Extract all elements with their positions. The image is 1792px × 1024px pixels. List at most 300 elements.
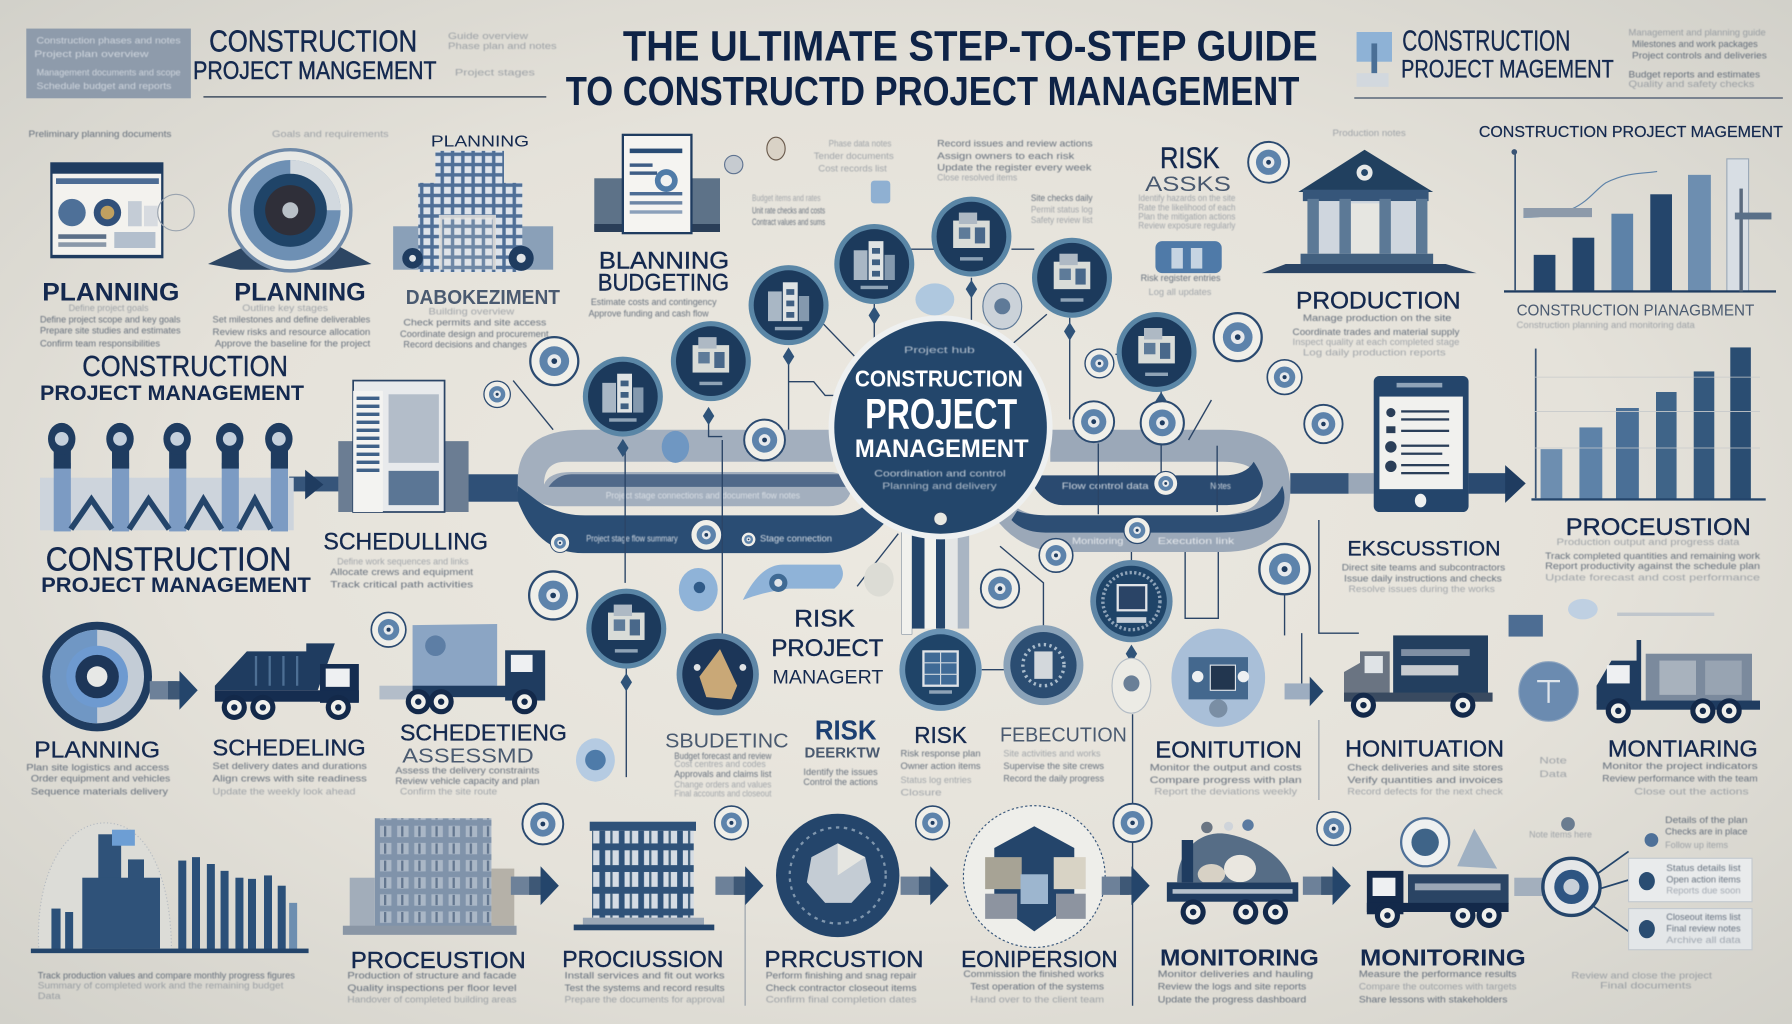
text block: notes: Assign owners to each risk xyxy=(937,151,1075,161)
hub text: Planning and delivery xyxy=(882,481,997,491)
diamonds xyxy=(617,280,1167,691)
label: risk project management xyxy=(771,605,884,688)
text block xyxy=(1150,762,1302,796)
ribbon: right loop xyxy=(994,430,1290,552)
text block: Update forecast and cost performance xyxy=(1545,573,1760,583)
text block: Handover of completed building areas xyxy=(347,994,517,1004)
text block xyxy=(803,767,878,787)
text block: Log daily production reports xyxy=(1303,347,1446,357)
panel: header left gray note: Schedule budget and reports xyxy=(37,81,172,91)
text block: notes: Safety review list xyxy=(1031,215,1093,225)
hub text: Coordination and control xyxy=(874,469,1006,479)
text block: Close out the actions xyxy=(1634,786,1749,796)
ribbon: right loop: Execution link xyxy=(1158,536,1235,546)
label: scheduling: SCHEDULLING xyxy=(323,529,488,556)
text block: Data xyxy=(38,991,62,1001)
icon: truck with seal xyxy=(1367,818,1509,928)
text block: top notes xyxy=(814,138,894,173)
text block xyxy=(1342,562,1506,594)
text block: side note: Note xyxy=(1539,755,1567,765)
arrow xyxy=(1303,866,1351,905)
text block: Approve funding and cash flow xyxy=(589,309,709,319)
label: scheduling assessment: SCHEDETIENG xyxy=(400,720,567,746)
icon: marker xyxy=(1317,812,1351,845)
text block xyxy=(1359,969,1517,1004)
arrow xyxy=(1285,677,1323,706)
text block: Estimate costs and contingency xyxy=(591,297,717,307)
text block: budget notes: Contract values and sums xyxy=(752,217,825,227)
text block: Define project goals xyxy=(69,303,149,313)
panel: header left gray note xyxy=(26,29,191,98)
text block: side note xyxy=(1539,755,1568,779)
text block: Record the daily progress xyxy=(1003,774,1104,784)
text block: notes xyxy=(937,138,1093,225)
text block: Set milestones and define deliverables xyxy=(213,314,371,324)
text block: Status log entries xyxy=(901,775,972,785)
diagram: hub with two cards xyxy=(1543,851,1752,950)
text block: Review risks and resource allocation xyxy=(213,327,370,337)
text block xyxy=(1003,749,1104,784)
label: monitoring: MONITORING xyxy=(1360,945,1526,971)
ribbon: left loop xyxy=(518,430,891,553)
text block: Review performance with the team xyxy=(1602,774,1758,784)
icon: hub pin xyxy=(934,512,947,526)
label: scheduling assessment xyxy=(400,720,567,767)
text block xyxy=(26,762,171,796)
text block: Allocate crews and equipment xyxy=(330,567,474,577)
text block: budget notes: Unit rate checks and costs xyxy=(752,206,825,216)
diagram: hub with two cards: Status details list xyxy=(1666,863,1741,873)
text block: Define project scope and key goals xyxy=(40,314,181,324)
text block: Summary of completed work and the remaining budget xyxy=(38,981,284,991)
icon: top markers xyxy=(1509,599,1714,637)
icon: marker xyxy=(715,806,748,840)
central hub xyxy=(829,315,1053,539)
caption note: Construction planning and monitoring data xyxy=(1517,320,1696,330)
text block xyxy=(901,749,981,797)
label: eonipersion: EONIPERSION xyxy=(961,946,1118,972)
heading: construction project mangement right: CONSTRUCTION xyxy=(1402,25,1570,57)
icon: box truck xyxy=(379,624,545,714)
title: TO CONSTRUCTD PROJECT MANAGEMENT xyxy=(566,68,1299,114)
label: monitoring 3: MONTIARING xyxy=(1608,736,1758,762)
text block: Control the actions xyxy=(803,777,878,787)
label: monitoring 1: EONITUTION xyxy=(1155,737,1302,763)
icon: seal with temple xyxy=(963,806,1105,947)
node lower 5 xyxy=(1090,560,1173,642)
hub text: PROJECT xyxy=(865,391,1017,438)
text block: row notes: Preliminary planning documents xyxy=(29,129,172,139)
row 4 flow xyxy=(31,804,1752,1004)
heading xyxy=(41,541,312,597)
text block: Risk response plan xyxy=(901,749,981,759)
text block: Test operation of the systems xyxy=(970,982,1104,992)
heading xyxy=(40,351,305,405)
text block: header small left: Phase plan and notes xyxy=(448,41,557,51)
icon: target dial xyxy=(208,150,371,271)
text block: Record defects for the next check xyxy=(1347,786,1503,796)
text block: Production of structure and facade xyxy=(347,970,517,980)
chart caption: CONSTRUCTION PIANAGBMENT xyxy=(1517,302,1754,319)
label: blanning budgeting: BUDGETING xyxy=(598,269,729,296)
text block: Check contractor closeout items xyxy=(766,983,917,993)
text block: Approve the baseline for the project xyxy=(215,338,371,348)
text block: top right notes: Details of the plan xyxy=(1665,815,1747,825)
text block: top right notes xyxy=(1529,815,1747,850)
text block: header small right: Management and planning guide xyxy=(1629,27,1766,37)
text block: top notes: Phase data notes xyxy=(829,138,892,148)
text block xyxy=(347,970,517,1004)
label: monitoring 2: HONITUATION xyxy=(1345,736,1504,762)
text block: Owner action items xyxy=(901,761,981,771)
text block: Risk register entries xyxy=(1141,273,1221,283)
label: prrcustion: PRRCUSTION xyxy=(765,946,923,972)
label: risk sub: DEERKTW xyxy=(805,746,880,762)
text block: Hand over to the client team xyxy=(970,994,1104,1004)
text block: header small right: Project controls and deliveries xyxy=(1632,50,1767,60)
panel: header left gray note: Management documents and scope xyxy=(37,67,181,77)
node lower 3 xyxy=(899,629,982,711)
heading: construction project mangement left: CONSTRUCTION xyxy=(209,23,417,58)
pale markers xyxy=(662,283,1151,713)
text block: Define work sequences and links xyxy=(337,557,469,567)
text block: Compare progress with plan xyxy=(1150,775,1302,785)
ribbon: right loop: Flow control data xyxy=(1062,481,1150,491)
text block: Outline key stages xyxy=(242,303,328,313)
arrow xyxy=(1102,866,1150,905)
text block: Test the systems and record results xyxy=(565,983,725,993)
node 7 xyxy=(1117,312,1197,392)
text block: Order equipment and vehicles xyxy=(31,774,171,784)
text block: Monitor deliveries and hauling xyxy=(1158,969,1313,979)
text block: Issue daily instructions and checks xyxy=(1344,574,1502,584)
text block xyxy=(40,303,181,348)
icon: marker xyxy=(916,806,949,840)
icon: presentation screen xyxy=(50,162,194,258)
text block: notes: Permit status log xyxy=(1031,205,1093,215)
text block: Install services and fit out works xyxy=(565,970,725,980)
panel: header left gray note: Project plan overview xyxy=(34,49,149,59)
crane xyxy=(1735,189,1771,291)
panel: construction project management pins xyxy=(40,351,488,597)
text block: Check permits and site access xyxy=(403,318,547,328)
hub text xyxy=(855,345,1029,491)
node lower 4 xyxy=(1003,625,1083,705)
icon: building xyxy=(393,151,553,272)
heading: construction project mangement left xyxy=(193,23,546,98)
title xyxy=(566,23,1318,114)
text block: Sequence materials delivery xyxy=(31,786,169,796)
text block: Assess the delivery constraints xyxy=(395,766,540,776)
axes xyxy=(1531,349,1766,501)
diagram: hub with two cards: Reports due soon xyxy=(1666,886,1741,896)
label: risk project management: RISK xyxy=(794,605,855,632)
arrow xyxy=(511,866,559,905)
label: blanning budgeting: BLANNING xyxy=(599,248,729,275)
text block: final note xyxy=(1571,970,1713,991)
ribbon: right loop: Monitoring xyxy=(1072,536,1123,546)
text block: header small right: Quality and safety checks xyxy=(1629,79,1755,89)
mini icons xyxy=(484,142,1343,619)
text block: Set delivery dates and durations xyxy=(213,761,367,771)
icon: badge circle xyxy=(776,814,899,937)
panel: blanning budgeting xyxy=(29,129,894,319)
heading: construction project mangement right xyxy=(1354,25,1783,99)
panel: risk assessment xyxy=(937,138,1236,297)
icon: monitoring badge xyxy=(1519,662,1578,721)
panel: planning dial xyxy=(208,150,371,348)
text block: Align crews with site readiness xyxy=(213,774,367,784)
text block: notes: Record issues and review actions xyxy=(937,138,1093,148)
text block xyxy=(330,557,474,589)
icon: temple building xyxy=(1262,150,1477,273)
text block: Track completed quantities and remaining work xyxy=(1545,551,1760,561)
text block xyxy=(1293,313,1460,357)
text block: header small left xyxy=(448,31,557,77)
text block: Quality inspections per floor level xyxy=(347,983,517,993)
connector lines xyxy=(513,249,1359,1006)
text block: Prepare the documents for approval xyxy=(565,994,725,1004)
row 3 flow xyxy=(26,560,1760,799)
text block: row notes: Goals and requirements xyxy=(272,129,389,139)
panel: building planning xyxy=(393,133,560,349)
text block: Monitor the project indicators xyxy=(1602,761,1758,771)
text block: Coordinate trades and material supply xyxy=(1293,327,1460,337)
text block: Identify hazards on the site xyxy=(1138,193,1235,203)
text block: Plan site logistics and access xyxy=(26,762,170,772)
text block: Update the weekly look ahead xyxy=(213,786,355,796)
label: planning: PLANNING xyxy=(34,737,160,763)
text block: Production output and progress data xyxy=(1557,537,1741,547)
text block: Coordinate design and procurement xyxy=(400,329,549,339)
text block: Share lessons with stakeholders xyxy=(1359,994,1508,1004)
text block xyxy=(1141,273,1221,297)
chart: building with bars xyxy=(31,823,309,953)
text block: Report the deviations weekly xyxy=(1154,786,1298,796)
label: risk: RISK xyxy=(815,714,877,745)
hub text: MANAGEMENT xyxy=(855,435,1029,463)
node lower 1 xyxy=(586,589,666,669)
axes xyxy=(1504,149,1776,293)
text block: Monitor the output and costs xyxy=(1150,762,1302,772)
text block: Record decisions and changes xyxy=(403,339,527,349)
text block: header small right: Budget reports and estimates xyxy=(1629,70,1760,80)
text block: header small right: Milestones and work packages xyxy=(1632,39,1758,49)
label: execution: EKSCUSSTION xyxy=(1347,535,1501,560)
text block: Manage production on the site xyxy=(1303,313,1451,323)
node 2 xyxy=(671,321,751,401)
text block: Building overview xyxy=(429,306,515,316)
ribbon: left loop: Stage connection xyxy=(760,534,832,544)
text block: Rate the likelihood of each xyxy=(1138,202,1235,212)
text block: Confirm team responsibilities xyxy=(40,338,160,348)
icon: dump truck xyxy=(215,643,359,720)
chart title: CONSTRUCTION PROJECT MAGEMENT xyxy=(1479,124,1783,141)
diagram: ribbons and connectors xyxy=(289,249,1526,1006)
diagram: hub with two cards: Open action items xyxy=(1666,874,1741,884)
text block: Plan the mitigation actions xyxy=(1138,211,1236,221)
diagram: hub with two cards: Final review notes xyxy=(1666,923,1741,933)
node 3 xyxy=(749,265,829,345)
text block xyxy=(38,970,295,1001)
text block: Budget forecast and review xyxy=(674,751,772,761)
text block xyxy=(1158,969,1313,1004)
text block: Commission the finished works xyxy=(963,969,1104,979)
text block: Approvals and claims list xyxy=(674,769,772,779)
text block: top right notes: Checks are in place xyxy=(1665,826,1747,836)
text block xyxy=(674,751,772,799)
text block: side note: Data xyxy=(1539,769,1568,779)
heading: construction project mangement left: PROJECT MANGEMENT xyxy=(193,57,437,85)
label: scheduling: SCHEDELING xyxy=(213,734,366,760)
label: production: PRODUCTION xyxy=(1296,288,1461,315)
text block: Cost centres and codes xyxy=(674,759,766,769)
label: planning small: PLANNING xyxy=(431,133,529,150)
text block: Perform finishing and snag repair xyxy=(766,970,917,980)
label: procession: PROCIUSSION xyxy=(562,946,723,972)
text block xyxy=(1347,762,1503,796)
icon: tablet xyxy=(1374,376,1469,512)
text block: notes: Update the register every week xyxy=(937,162,1092,172)
arrow xyxy=(150,671,198,710)
text block: Confirm final completion dates xyxy=(766,994,917,1004)
text block: top notes: Tender documents xyxy=(814,151,894,161)
node 6 xyxy=(1032,238,1112,318)
node 1 xyxy=(583,357,663,437)
panel: header left gray note: Construction phases and notes xyxy=(37,35,181,45)
label: planning: PLANNING xyxy=(42,279,179,307)
icon: risk panel xyxy=(1155,241,1222,273)
text block: Change orders and values xyxy=(674,779,772,789)
text block: Identify the issues xyxy=(803,767,878,777)
text block: Check deliveries and site stores xyxy=(1347,762,1503,772)
trend annotation xyxy=(1523,171,1657,217)
text block: Compare the outcomes with targets xyxy=(1359,982,1517,992)
diagram: hub with two cards: Closeout items list xyxy=(1666,912,1741,922)
label: budgeting: SBUDETINC xyxy=(665,729,789,752)
stripes below hub xyxy=(902,526,969,634)
text block: Review the logs and site reports xyxy=(1158,982,1307,992)
icon: building gray xyxy=(343,818,517,935)
diagram: hub with two cards: Archive all data xyxy=(1666,935,1742,945)
label: risk project management: MANAGERT xyxy=(773,666,884,688)
text block: final note: Final documents xyxy=(1600,981,1692,991)
label: monitoring: MONITORING xyxy=(1160,945,1319,971)
icon: header right xyxy=(1357,32,1392,87)
icon: arrow stub xyxy=(1514,878,1544,896)
text block: Direct site teams and subcontractors xyxy=(1342,562,1506,572)
arrow xyxy=(901,866,949,905)
label: blanning budgeting xyxy=(598,248,729,296)
text block: Resolve issues during the works xyxy=(1349,584,1495,594)
text block: Measure the performance results xyxy=(1359,969,1517,979)
text block xyxy=(766,970,917,1004)
label: planning: PLANNING xyxy=(234,279,366,307)
hub text: CONSTRUCTION xyxy=(855,365,1023,391)
label: risk: RISK xyxy=(914,722,967,748)
text block: top note: Production notes xyxy=(1333,128,1406,138)
text block: Prepare site studies and estimates xyxy=(40,326,181,336)
text block: final note: Review and close the project xyxy=(1571,970,1713,980)
text block: header small right xyxy=(1629,27,1767,89)
heading: PROJECT MANAGEMENT xyxy=(40,380,305,405)
text block: Update the progress dashboard xyxy=(1158,994,1306,1004)
icon: marker xyxy=(522,804,563,844)
hub text: Project hub xyxy=(904,345,975,355)
text block: Supervise the site crews xyxy=(1003,761,1104,771)
text block: Track production values and compare monthly progress figures xyxy=(38,970,295,980)
chart: rising bars lower xyxy=(1531,347,1766,583)
node lower 2 xyxy=(677,633,759,715)
text block: Report productivity against the schedule plan xyxy=(1545,561,1760,571)
label: risk project management: PROJECT xyxy=(771,635,884,662)
arrow xyxy=(715,866,763,905)
nodes upper arc xyxy=(484,142,1343,713)
node 4 xyxy=(834,224,914,304)
heading: CONSTRUCTION xyxy=(82,351,288,383)
node 5 xyxy=(931,197,1011,277)
blue pill marker xyxy=(679,562,894,611)
ribbon: left loop: Project stage flow summary xyxy=(586,534,678,544)
text block: header small left: Project stages xyxy=(455,67,535,77)
bars xyxy=(1541,347,1751,499)
text block xyxy=(1602,761,1758,796)
ribbon: left loop: Project stage connections and document flow notes xyxy=(606,490,800,500)
text block xyxy=(963,969,1104,1004)
text block: Review vehicle capacity and plan xyxy=(395,776,539,786)
text block: Closure xyxy=(901,787,942,797)
text block xyxy=(213,761,367,796)
text block: notes: Site checks daily xyxy=(1031,193,1093,203)
icon: sphere xyxy=(1171,629,1265,727)
text block xyxy=(395,766,540,796)
text block: notes: Close resolved items xyxy=(937,173,1018,183)
title: THE ULTIMATE STEP-TO-STEP GUIDE xyxy=(623,23,1318,70)
label: asssks: ASSKS xyxy=(1145,171,1231,196)
text block xyxy=(400,306,549,349)
arrow: flow left xyxy=(289,470,526,502)
arrow: flow right xyxy=(1290,465,1526,503)
label: proceustion: PROCEUSTION xyxy=(351,947,526,973)
heading: construction project mangement right: PROJECT MAGEMENT xyxy=(1401,56,1614,84)
icon: truck dark box xyxy=(1344,635,1493,718)
label: scheduling assessment: ASSESSMD xyxy=(402,744,534,767)
icon: ring xyxy=(42,622,152,731)
panel: planning screen xyxy=(40,162,194,348)
text block: top notes: Cost records list xyxy=(818,163,887,173)
label: assessment: DABOKEZIMENT xyxy=(406,286,560,309)
label: execution: FEBECUTION xyxy=(1000,724,1127,747)
ribbon: right loop: Notes xyxy=(1210,481,1231,491)
text block: Review exposure regularly xyxy=(1138,221,1236,231)
panel: production temple xyxy=(1262,128,1477,357)
chart: rising bars upper xyxy=(1479,124,1783,330)
icon: blue marker xyxy=(576,738,615,782)
text block: top right notes: Follow up items xyxy=(1665,840,1728,850)
text block: Final accounts and closeout xyxy=(674,789,772,799)
text block: Log all updates xyxy=(1149,287,1212,297)
chart: pins xyxy=(40,423,294,531)
text block: Inspect quality at each completed stage xyxy=(1293,337,1459,347)
text block: row notes xyxy=(29,129,389,139)
text block xyxy=(1138,193,1236,231)
text block xyxy=(1545,537,1760,583)
icon: marker xyxy=(1113,804,1152,842)
icon: building blue xyxy=(574,822,714,930)
icon: small marker xyxy=(725,137,890,203)
icon: flatbed truck with pile xyxy=(1167,819,1298,925)
text block xyxy=(589,297,717,319)
